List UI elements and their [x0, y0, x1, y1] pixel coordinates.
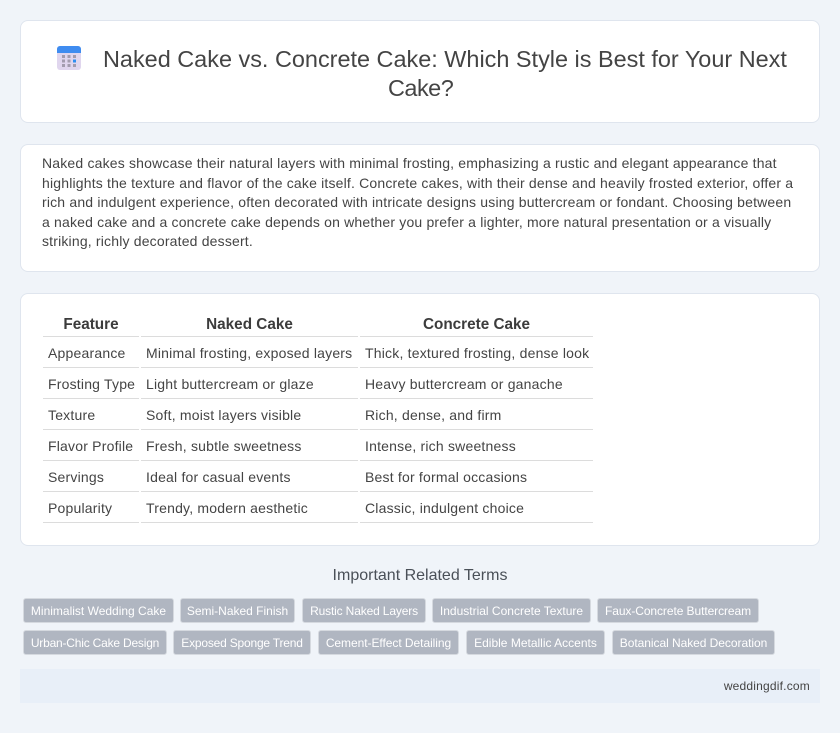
related term tags: Exposed Sponge Trend — [181, 636, 303, 650]
related term tags: Minimalist Wedding Cake — [31, 604, 166, 618]
table: Trendy, modern aesthetic — [146, 500, 308, 516]
description text: highlights the texture and flavor of the cake itself. Concrete cakes, with their dense and heavily frosted exterior, offer a — [42, 175, 793, 191]
table: Popularity — [48, 500, 112, 516]
table: Heavy buttercream or ganache — [365, 376, 563, 392]
description text — [42, 155, 794, 249]
description text: rich and indulgent experience, often decorated with intricate designs using buttercream or fondant. Choosing between — [42, 194, 791, 210]
related term tags: Industrial Concrete Texture — [440, 604, 583, 618]
title: Naked Cake vs. Concrete Cake: Which Style is Best for Your Next — [103, 46, 787, 72]
table: Servings — [48, 469, 104, 485]
table: Soft, moist layers visible — [146, 407, 301, 423]
footer source: weddingdif.com — [724, 679, 810, 693]
table: Appearance — [48, 345, 126, 361]
table: Flavor Profile — [48, 438, 133, 454]
table: Classic, indulgent choice — [365, 500, 524, 516]
icon: calendar — [57, 46, 81, 70]
footer bar — [20, 669, 820, 703]
table — [43, 316, 593, 523]
table: Rich, dense, and firm — [365, 407, 501, 423]
table: Light buttercream or glaze — [146, 376, 314, 392]
table: Naked Cake — [206, 316, 293, 333]
related term tags: Botanical Naked Decoration — [620, 636, 767, 650]
table: Fresh, subtle sweetness — [146, 438, 302, 454]
heading: related terms: Important Related Terms — [333, 567, 507, 584]
table: Ideal for casual events — [146, 469, 291, 485]
table: Concrete Cake — [423, 316, 530, 333]
related term tags: Edible Metallic Accents — [474, 636, 597, 650]
table: Intense, rich sweetness — [365, 438, 516, 454]
related term tags: Faux-Concrete Buttercream — [605, 604, 751, 618]
table: Frosting Type — [48, 376, 135, 392]
related term tags: Cement-Effect Detailing — [326, 636, 451, 650]
title: Cake? — [388, 75, 453, 101]
table: Texture — [48, 407, 95, 423]
description text: Naked cakes showcase their natural layers with minimal frosting, emphasizing a rustic and elegant appearance that — [42, 155, 777, 171]
related term tags: Urban-Chic Cake Design — [31, 636, 159, 650]
panel: comparison table — [20, 293, 820, 546]
title — [103, 46, 787, 101]
table: Feature — [63, 316, 119, 333]
header panel — [20, 20, 820, 123]
description text: striking, richly decorated dessert. — [42, 233, 253, 249]
table: Thick, textured frosting, dense look — [365, 345, 589, 361]
panel: description — [20, 144, 820, 272]
table: Minimal frosting, exposed layers — [146, 345, 352, 361]
table: Best for formal occasions — [365, 469, 527, 485]
related term tags — [23, 598, 775, 655]
related term tags: Rustic Naked Layers — [310, 604, 418, 618]
description text: a naked cake and a concrete cake depends on whether you prefer a lighter, more natural presentation or a visually — [42, 214, 771, 230]
related term tags: Semi-Naked Finish — [187, 604, 288, 618]
